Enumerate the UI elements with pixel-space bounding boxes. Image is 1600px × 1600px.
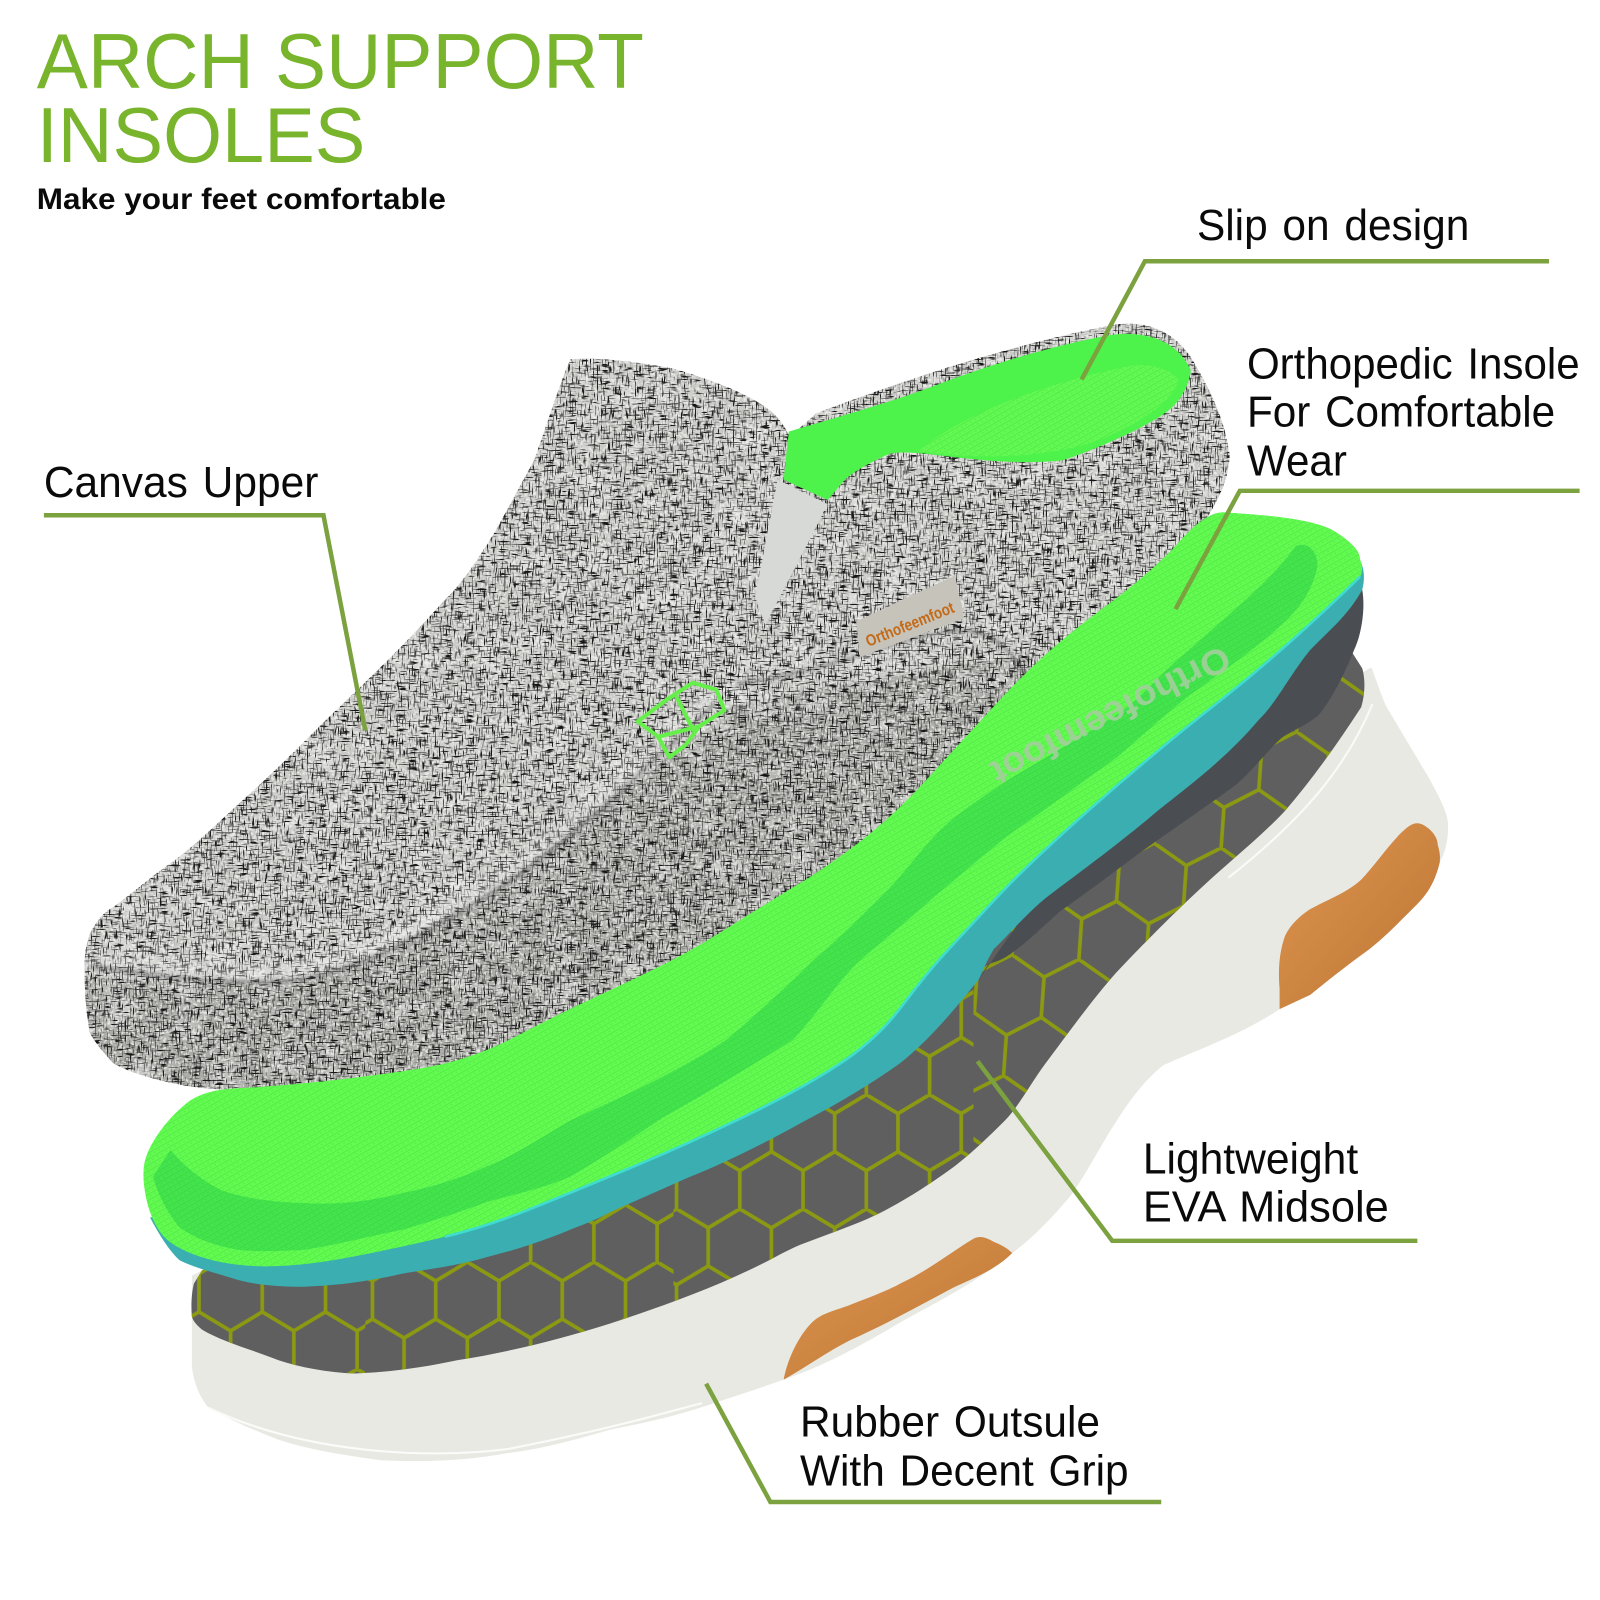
insole darker arch band xyxy=(153,545,1317,1251)
callout: lightweight EVA midsole: EVA Midsole xyxy=(1143,1182,1389,1231)
insole knit mesh xyxy=(143,512,1362,1266)
callout: slip on design: Slip on design xyxy=(1197,201,1469,250)
callout: orthopedic insole: Wear xyxy=(1247,437,1347,486)
fold line along the moc toe xyxy=(91,704,714,982)
canvas weave light flecks xyxy=(71,306,1245,1122)
midsole: grey EVA with honeycomb xyxy=(191,653,1364,1374)
callout: rubber outsule xyxy=(706,1384,1161,1502)
elastic gore xyxy=(755,480,828,624)
callout: rubber outsule: With Decent Grip xyxy=(800,1447,1129,1496)
label tag on shoe xyxy=(856,576,964,657)
insole: teal base xyxy=(150,560,1364,1287)
subtitle: Make your feet comfortable xyxy=(37,183,446,216)
callout: lightweight EVA midsole: Lightweight xyxy=(1143,1134,1358,1183)
canvas lower wall shading xyxy=(71,653,1031,1122)
title: ARCH SUPPORT xyxy=(37,19,644,105)
title xyxy=(37,19,644,179)
insole: green top surface xyxy=(143,512,1362,1266)
callout: canvas upper xyxy=(44,458,365,731)
callout: slip on design xyxy=(1082,201,1549,380)
canvas weave dark dashes xyxy=(71,306,1245,1122)
callout: rubber outsule: Rubber Outsule xyxy=(800,1398,1100,1447)
callout: orthopedic insole: Orthopedic Insole xyxy=(1247,340,1580,389)
canvas low frequency light patches xyxy=(71,306,1245,1122)
canvas upper shoe xyxy=(71,306,1245,1122)
callout: lightweight EVA midsole xyxy=(978,1061,1417,1241)
green stitching on vamp xyxy=(638,683,724,757)
insole cyan edge line xyxy=(445,577,1360,1237)
callout: orthopedic insole xyxy=(1176,340,1580,609)
lining mesh texture xyxy=(918,365,1179,456)
outsole: forefoot gum rubber pad xyxy=(784,1237,1012,1380)
canvas weave dark threads xyxy=(71,306,1245,1122)
panel: exploded shoe illustration xyxy=(71,306,1448,1461)
heel opening lining xyxy=(784,334,1191,500)
canvas base colour xyxy=(71,306,1245,1122)
dark foam layer beneath insole xyxy=(979,590,1363,980)
title: INSOLES xyxy=(37,93,365,179)
outsole: white rubber sole xyxy=(192,667,1448,1461)
tag text: Orthofeemfoot xyxy=(863,599,957,651)
canvas fold highlight xyxy=(91,694,714,972)
callout: canvas upper: Canvas Upper xyxy=(44,458,318,507)
outsole: heel gum rubber pad xyxy=(1279,823,1440,1009)
callout: orthopedic insole: For Comfortable xyxy=(1247,388,1555,437)
side flap seam xyxy=(737,631,1029,684)
insole brand print: Orthofeemfoot xyxy=(984,638,1237,793)
lining lighter mesh centre xyxy=(918,365,1179,456)
